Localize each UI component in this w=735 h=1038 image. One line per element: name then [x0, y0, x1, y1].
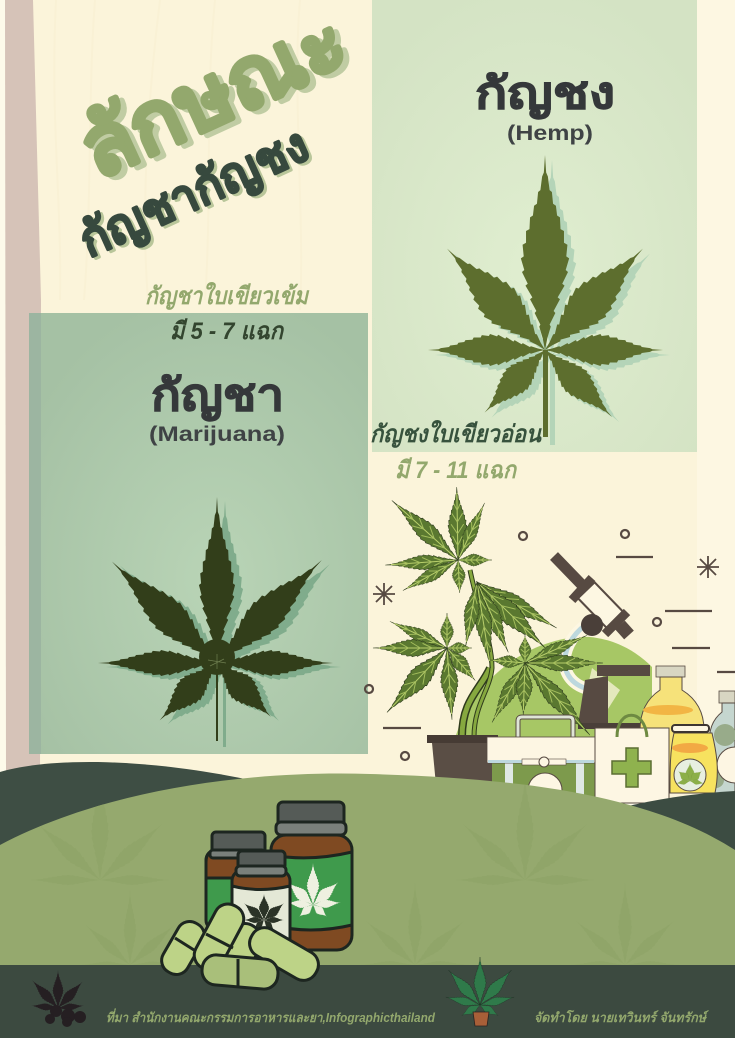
- heading: hemp: กัญชง: [475, 69, 615, 119]
- icon: plant pot: [427, 570, 498, 785]
- heading: marijuana: [149, 371, 285, 446]
- label: marijuana leaf colour: กัญชาใบเขียวเข้ม: [145, 282, 310, 310]
- plant leaf left: [373, 613, 481, 720]
- icon: yellow bottle: [640, 666, 704, 790]
- faint leaf pattern: [40, 804, 350, 1018]
- marijuana leaf: [98, 497, 342, 747]
- panel: hemp: [372, 0, 697, 452]
- footer bar: [0, 965, 735, 1038]
- plant leaf right: [485, 629, 603, 741]
- heading: hemp: [475, 69, 615, 145]
- subtitle: กัญชากัญชง: [75, 121, 320, 271]
- icon: microscope: [554, 556, 655, 729]
- author credit: จัดทำโดย นายเทวินทร์ จันทรักษ์: [534, 1009, 709, 1025]
- hills: [0, 762, 735, 969]
- label: hemp leaflet count: มี 7 - 11 แฉก: [395, 457, 517, 484]
- hemp leaf: [428, 155, 670, 445]
- small front bottle: [232, 851, 290, 948]
- icon: medicine bag: [595, 715, 669, 803]
- plant leaf upper: [385, 487, 492, 596]
- back bottle: [206, 832, 266, 930]
- icon: dark leaf and capsules: [28, 970, 86, 1027]
- icon: medical case: [487, 717, 595, 807]
- heading: marijuana: กัญชา: [151, 371, 284, 421]
- label: marijuana leaflet count: มี 5 - 7 แฉก: [170, 318, 284, 345]
- plant leaf drooping: [458, 574, 561, 669]
- heading: hemp: (Hemp): [507, 122, 593, 145]
- heading: marijuana: (Marijuana): [149, 423, 285, 446]
- capsules: [157, 899, 324, 990]
- large bottle: [271, 802, 352, 950]
- panel: marijuana: [29, 313, 368, 754]
- subtitle: กัญชากัญชง: [72, 119, 317, 269]
- icon: small yellow jar: [670, 725, 717, 793]
- icon: herb jar: [708, 691, 735, 795]
- title: ลักษณะ: [71, 0, 367, 199]
- illustration: lab and plant: [365, 487, 735, 807]
- green blob: [453, 637, 652, 800]
- icon: medicine bottles and capsules: [157, 802, 352, 990]
- icon: potted leaf: [444, 957, 516, 1026]
- source credit: ที่มา สำนักงานคณะกรรมการอาหารและยา,Infographicthailand: [106, 1008, 436, 1025]
- label: hemp leaf colour: กัญชงใบเขียวอ่อน: [370, 420, 542, 448]
- left pink strip: [5, 0, 41, 775]
